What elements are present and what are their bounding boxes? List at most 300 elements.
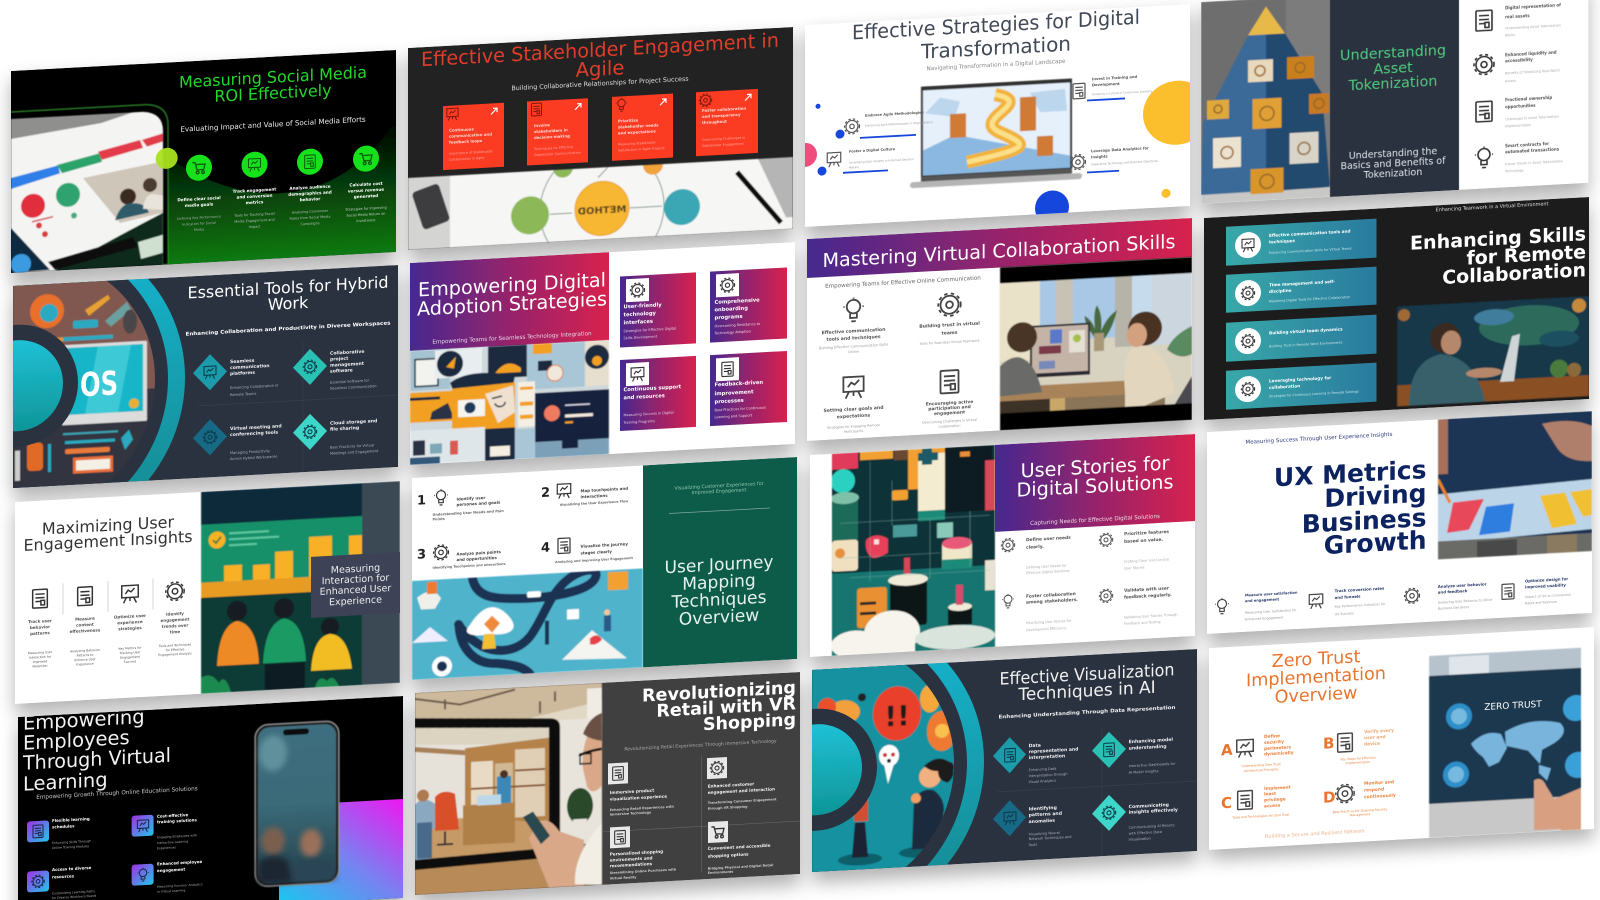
item: analyze audience: Campaigns [301,221,320,226]
column 4: for Effective [166,647,184,652]
column 1: behavior [30,624,50,630]
item 3: Network Techniques and [1029,835,1071,841]
card 4: Leveraging technology for [1269,375,1332,383]
subtitle: Building Collaborative Relationships for Project Success [511,75,689,92]
item 1: tools and techniques [826,333,881,342]
title: Shopping [703,710,796,735]
item 1: Understanding Asset Tokenization [1505,23,1561,30]
image: store seen through a tablet [415,683,602,895]
item 3: Foster collaboration [1026,591,1076,599]
column 2: Analyzing Behavior [70,648,101,653]
subtitle: Empowering Teams for Seamless Technology Integration [432,331,592,346]
column 1: Measure user satisfaction [1245,591,1298,598]
card 1: technology [623,311,657,318]
item: analytics: Integrating Technology and Business Objectives [1091,159,1159,166]
item: track engagement: metrics [246,199,264,205]
column 2 [70,586,101,667]
item 1: Enhancing Collaboration in [230,384,278,390]
callout: measuring interaction: Measuring [331,563,380,576]
item 2: Essential Software for [330,379,370,385]
card 3: and expectations [618,128,657,135]
item 1: Identify user [456,495,485,501]
card 2: stakeholders in [534,127,568,134]
item 4: Bridging Physical and Digital Retail [708,863,773,871]
column 4: Identify [166,610,184,616]
card 4: throughout [702,118,727,124]
item: training: Fostering a Culture of Continuous Learning [1092,89,1152,96]
item 2 [1092,728,1176,777]
title: Mapping [682,571,756,595]
card 4: and transparency [702,111,741,118]
title: Effective Stakeholder Engagement in [421,29,779,71]
item 3: Streamlining Online Purchases with [610,867,677,875]
item: training [1073,74,1152,102]
slide: Empowering Employees Through Virtual Learning [18,691,403,900]
title: Growth [1324,526,1426,560]
column 1: Retention [33,664,47,669]
item 4 [132,858,203,895]
item 4: 4 [541,540,550,556]
title: User Stories for [1021,451,1169,483]
title: Retail with VR [656,694,797,722]
item 1: Online Training Modules [52,844,89,850]
item 3: expectations [837,412,870,420]
slide: Measuring Social Media ROI [6,50,396,275]
decorative disk [755,705,877,834]
title [1340,43,1446,95]
item 2: Engaging Employees with [157,833,197,839]
column 1: Measuring User Satisfaction for [1245,608,1297,615]
title: Zero Trust [1272,647,1360,672]
item 1: Points [432,517,445,522]
item: define goals: media goals [185,201,214,208]
item 1 [1476,2,1561,39]
item 4: participation and [928,404,971,412]
item B [1323,727,1394,766]
subtitle: Enhancing Understanding Through Data Representation [998,705,1176,721]
item: define goals: Media [194,227,204,232]
slide: Essential Tools for Hybrid Work [13,265,398,488]
title: Asset [1373,60,1413,78]
item 1: clearly. [1026,543,1044,550]
item 4: Visualize the journey [580,541,628,548]
item: agile: Embrace Agile Methodologies [865,111,924,118]
item A: Understanding Zero Trust [1241,762,1281,768]
title: User Journey [665,552,773,578]
item D: respond [1364,786,1384,793]
phone mockup [255,721,339,887]
column 4 [158,581,192,657]
card 2 [527,98,588,166]
item 2: Benefits of Tokenizing Real-World [1505,68,1560,75]
title: Techniques [671,588,767,613]
item 2: Seamless Communication [330,384,377,391]
card 2: Technology Adoption [714,329,751,335]
item 3 [27,864,97,900]
item 2: Tools for Seamless Virtual Teamwork [918,339,980,346]
item 3 [1002,590,1078,634]
card 3: Continuous support [623,384,682,393]
column 4 [1502,575,1571,607]
title: Maximizing User [42,512,174,539]
item 1: Immersive Technology [610,810,652,817]
subtitle: Navigating Transformation in a Digital Landscape [927,59,1066,72]
item 4: Overcoming Challenges in Virtual [922,418,977,425]
accent: lime dot [156,147,178,169]
title [179,63,367,108]
item B: Key Steps for Effective [1341,756,1376,762]
card 1: Enhancing Communication Skills for Virtual Teams [1269,246,1352,255]
item 3: Setting clear goals and [823,404,884,414]
item: culture: Leveraging Data Insights in Informed Decision [849,157,914,165]
item 3: resources [52,873,75,879]
item 3: 3 [417,547,426,563]
card 3: Satisfaction in Agile Projects [618,146,665,153]
panel: green title band [643,457,797,667]
column 2: Enhance User [74,657,96,662]
item: calculate cost: Calculate cost [349,180,383,187]
title: Empowering Digital [418,268,606,302]
callout: measuring interaction [311,552,400,618]
item: calculate cost: Investment [356,218,376,223]
item 3: environments and [610,855,653,862]
column 2: Experience [76,662,94,667]
image: engagement chart and audience [201,481,400,694]
card 4: Learning and Support [714,413,753,419]
decorative disk [0,321,78,450]
item D [1323,779,1396,819]
item 3: Across Hybrid Workspaces [230,455,277,461]
title: Empowering [23,705,145,735]
title: Digital Solutions [1016,470,1174,502]
column 1: Measuring User [28,650,53,655]
item 3: anomalies [1029,817,1055,825]
item: track engagement [233,151,276,230]
card 3: stakeholder needs [618,122,659,129]
card 2: discipline [1269,287,1292,293]
item 4: Feedback and Testing [1124,620,1161,626]
item D: Monitor and [1364,779,1394,786]
item 2: Interactive Learning [157,839,188,845]
card 1: Effective communication tools and [1269,228,1350,237]
item: analyze audience: behavior [300,196,321,202]
item 4 [1475,140,1563,175]
item 2: teams [942,329,958,336]
item 4: Convenient and accessible [708,842,771,851]
title [852,5,1140,67]
item 2: management [330,360,365,368]
title: UX Metrics [1274,455,1426,492]
column 2: effectiveness [70,627,101,634]
item B: device [1364,740,1380,747]
card 1: Skills Development [623,334,658,340]
item 2: Enhanced customer [708,781,755,788]
callout: measuring interaction: Experience [329,594,382,608]
card 1 [443,103,504,170]
item 4: engagement [157,866,185,873]
item 1 [993,733,1078,786]
item 3: and opportunities [456,554,497,562]
item: define goals: Defining Key Performance [177,215,221,221]
item C [1221,784,1291,820]
item 3: Analyze pain points [456,549,501,556]
item 3: recommendations [610,861,653,868]
title: Transformation [920,32,1071,64]
title: Engagement Insights [24,527,193,555]
column 3: Tracking User [119,650,141,655]
panel: title gradient [410,252,609,351]
slide: Enhancing Skills for Remote Collaboration [1204,197,1589,420]
item 3: Tools [1028,843,1037,847]
item 2 [1099,528,1169,572]
item 3: Virtual meeting and [230,423,282,432]
decorative ring [672,606,984,900]
item 1: Data [1029,742,1041,749]
item: agile [844,110,933,140]
card 3 [1226,315,1376,362]
title [665,552,773,631]
title: Employees [23,726,130,755]
tablet view [415,721,549,860]
card 1: Importance of Stakeholder [449,149,494,156]
column 3: Engagement [120,655,141,660]
item: calculate cost: generated [354,192,378,199]
card 3: Measuring Success in Digital [623,411,674,417]
item 2: Collaborative [330,348,364,356]
column 4: Rates and Revenue [1525,600,1557,605]
column 2: and funnels [1335,593,1361,600]
item 1: communication [230,363,270,371]
item 3 [610,824,677,881]
card 2: Involve [534,122,550,128]
item 4: shopping options [708,851,749,858]
item: training: Development [1092,82,1120,87]
item 4: with Effective Data [1129,830,1162,836]
card 4: Stakeholder Engagement [702,142,744,148]
column 4: improved usability [1525,582,1566,589]
card 4: improvement [714,389,754,397]
panel: title gradient [995,434,1195,532]
item 3: opportunities [1505,102,1536,109]
item: track engagement: Tools for Tracking Social [233,212,275,218]
column 1: Interaction for [29,654,52,660]
item C: access [1264,803,1281,809]
item A: Define [1264,733,1280,740]
item: define goals: Define clear social [177,195,221,202]
title: Tokenization [1348,74,1437,95]
slide: Maximizing User Engagement Insights [15,481,400,704]
card 4: Strategies for Continuous Learning in Remote Settings [1269,390,1359,398]
subtitle: Measuring Success Through User Experience Insights [1246,432,1393,446]
title [1274,455,1426,563]
item: agile: Enhancing Agile Methodologies in Organizations [865,120,933,128]
item 1: Enhancing Skills Through [52,839,91,845]
item 4 [922,369,977,430]
item: analyze audience: demographics and [288,189,332,196]
item B: user and [1364,734,1386,741]
card 1: communication and [449,131,492,138]
item A: Architecture Principles [1244,767,1279,773]
item 3: Access to diverse [52,864,92,872]
title [1000,660,1174,706]
item 2: accessibility [1505,56,1533,63]
item C: least [1264,790,1276,797]
card 2: Comprehensive [714,297,760,306]
subtitle: Capturing Needs for Effective Digital Solutions [1030,514,1160,527]
item: define goals: Indicators for Social [182,221,216,227]
item C: Implement [1264,784,1291,792]
callout: measuring interaction: Enhanced User [320,583,391,598]
column 3: experience [117,619,143,625]
item 3: Visualizing Neural [1029,831,1060,836]
item 4 [293,410,379,458]
image: social media metrics on a tablet [6,103,168,275]
card 4 [710,351,787,426]
column 2: UX Success [1335,611,1354,616]
item 1: Flexible learning [52,816,90,823]
bubble label: !! [884,699,910,733]
card 4 [696,89,758,156]
title: Effective Strategies for Digital [852,5,1140,44]
item 3: Managing Productivity [230,449,271,455]
column 4: time [170,628,180,634]
column 1 [1215,591,1298,623]
item 3: Strategies for Engaging Remote [827,423,880,430]
title: Enhancing Skills [1410,223,1586,255]
item 4 [541,534,633,565]
column 2: Patterns to [77,653,94,658]
item 4: Measuring Success: Analytics [157,882,203,889]
column 3: and feedback [1438,588,1468,594]
column 1: Enhanced Engagement [1245,615,1284,622]
slide: Effective Stakeholder Engagement [408,27,793,281]
item 2: Enhanced liquidity and [1505,49,1557,57]
title: Learning [23,768,108,796]
image: chart paper and hand [1438,411,1592,559]
card 1 [1226,219,1376,266]
column 2: Track conversion rates [1335,585,1385,593]
card 3: Prioritize [618,117,638,123]
card 1: Strategies for Effective Digital [623,326,676,333]
column 3: Business Decisions [1438,605,1469,611]
item 1: Immersive product [610,787,654,795]
image: method diagram on a desk [408,136,793,281]
card 4 [1226,363,1376,410]
item D: D [1323,788,1335,807]
column 1: and engagement [1245,597,1280,603]
item: analyze audience: Analyzing Conversion [292,209,328,215]
item 1 [417,486,504,522]
item 1: schedules [52,823,75,829]
item 3 [1476,94,1559,130]
image: token pyramid [1201,0,1331,204]
title [642,678,797,739]
column 4: Impact of UX on Conversion [1525,593,1571,599]
item 4 [1092,791,1178,844]
column 3: Success [124,659,137,664]
top label: Enhancing Teamwork in a Virtual Environment [1436,201,1548,213]
title: Overview [1275,683,1357,708]
tablet bezel [415,710,560,870]
title [24,511,193,555]
item: analyze audience [288,148,332,227]
item 2: Transforming Consumer Engagement [708,797,777,805]
item 2: understanding [1129,743,1167,751]
item: culture: Making [849,165,859,170]
card 2: Techniques for Effective [533,145,573,151]
footer note: Building a Secure and Resilient Network [1265,828,1365,840]
image: children at a computer [1000,257,1192,430]
card 1: Continuous [449,126,474,132]
item 1: Visual Analytics [1029,779,1056,784]
card 2 [710,267,787,343]
item: track engagement: Impact [249,224,261,229]
item 1: Effective communication [822,326,885,336]
slide: Revolutionizing Retail with VR Shopping [415,672,800,895]
title: Essential Tools for Hybrid [187,273,388,302]
title [421,29,779,90]
item 3: patterns and [1029,810,1062,818]
image: flat-style collage [410,334,609,465]
title: for Remote [1466,241,1586,270]
item 1 [193,351,278,399]
item 2: User Stories [1124,565,1145,571]
item 4: engagement [934,409,965,417]
item 1: representation and [1029,746,1078,755]
item 1: Basics [1505,33,1516,37]
title [187,273,388,318]
card 2 [1226,267,1376,313]
item 4: Meetings and Engagement [330,449,379,456]
item C: C [1221,794,1232,812]
item D: continuously [1364,792,1396,800]
item 1: Enhancing Retail Experiences with [610,805,674,812]
item 2 [1474,49,1560,85]
decorative blobs [793,79,1211,239]
slide: Empowering Digital Adoption Strategies [410,242,795,465]
item 1: Building Effective Communication Skills [819,343,888,350]
item 2: Assets [1505,79,1516,83]
title: Effective Visualization [999,660,1174,690]
item 4 [1099,584,1178,627]
item 3: Challenges in Asset Tokenization [1505,115,1559,121]
column 2: Key Performance Indicators for [1335,602,1386,609]
card 1: interfaces [623,319,653,326]
item 3: among stakeholders. [1026,596,1078,605]
item 2: based on value. [1124,536,1163,544]
subtitle: Empowering Teams for Effective Online Communication [825,276,981,290]
item 2 [132,811,197,852]
item: culture: Foster a Digital Culture [849,147,896,154]
item 1: Effective Digital Solutions [1026,569,1070,575]
item 3: Fractional ownership [1505,94,1552,102]
slide: Mastering Virtual Collaboration Skills [807,218,1192,441]
item 2: through VR Shopping [708,805,748,811]
item 1: visualization experience [610,793,667,801]
item C: privilege [1264,796,1286,803]
item: training: Invest in Training and [1092,75,1138,81]
subtitle: Basics and Benefits of [1340,156,1446,172]
item A: A [1221,741,1233,759]
title: ROI Effectively [214,81,332,106]
card 2: Stakeholder Communication [534,151,581,157]
title: Understanding [1340,43,1446,64]
item 4: Cloud storage and [330,418,377,426]
item 4: Best Practices for Virtual [330,443,374,450]
panel: header gradient [807,218,1192,278]
item 1: 1 [417,493,426,509]
item 2: project [330,355,349,362]
